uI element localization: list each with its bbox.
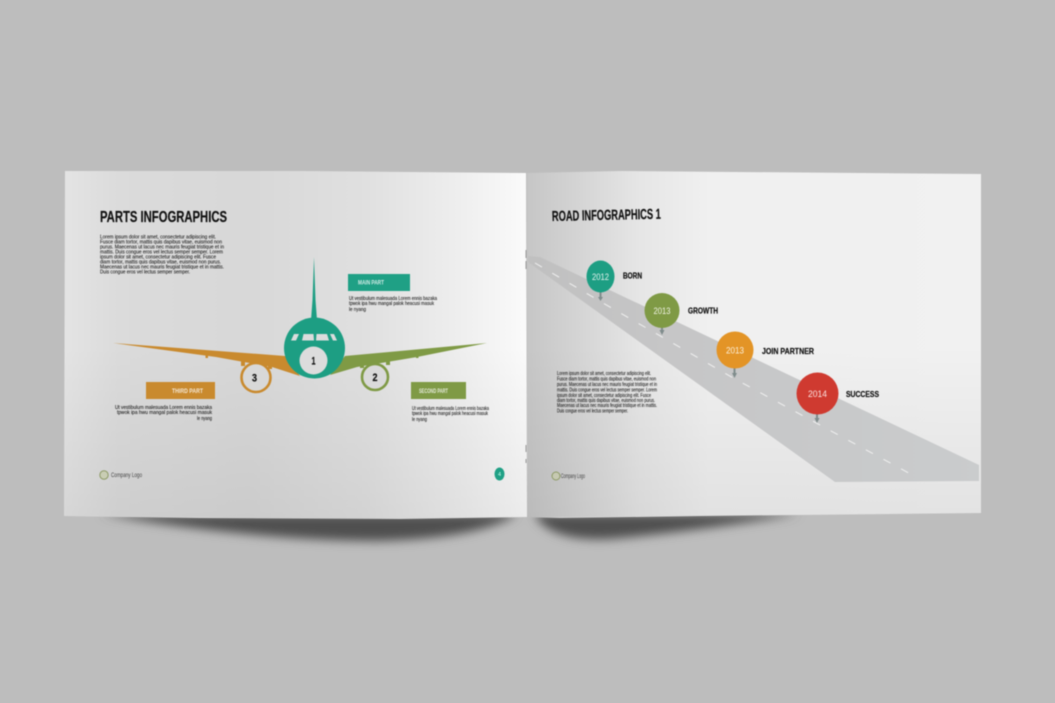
part 2 engine	[362, 364, 388, 390]
title: parts infographics: PARTS INFOGRAPHICS	[100, 209, 227, 226]
text block: road intro	[557, 371, 657, 414]
text block: third part	[115, 405, 213, 422]
text block: parts intro: Fusce diam tortor, mattis quis dapibus vitae, euismod non	[100, 240, 222, 246]
text block: main part: tpwok ipa hwu mangal palok heacusi masuk	[349, 301, 434, 307]
airplane diagram	[113, 257, 487, 392]
label: second part	[411, 382, 466, 399]
part 1 circle	[300, 346, 328, 374]
label: second part: SECOND PART	[419, 388, 448, 395]
title: road infographics: ROAD INFOGRAPHICS 1	[552, 207, 661, 225]
right wing	[330, 343, 487, 375]
part 3 engine: 3	[252, 372, 257, 384]
text block: road intro: mattis. Duis congue eros vel lectus semper semper. Lorem	[557, 388, 657, 394]
label: main part: MAIN PART	[358, 280, 384, 286]
left page	[64, 171, 527, 519]
page shadows	[100, 514, 800, 541]
text block: parts intro: mattis. Duis congue eros vel lectus semper semper. Lorem	[100, 250, 223, 256]
page number	[494, 468, 504, 480]
text block: third part: Ut vestibulum malesuada Lorem ennis bazaka	[115, 405, 213, 411]
road centre dashes	[535, 263, 918, 478]
label: third part	[146, 382, 215, 399]
right company logo	[552, 472, 585, 480]
milestone 2013 join partner	[716, 332, 814, 378]
milestone 2013 growth	[644, 293, 718, 335]
milestone 2013 growth: GROWTH	[688, 306, 718, 316]
part 3 engine	[242, 363, 270, 392]
fuselage	[284, 318, 345, 378]
part 2 engine: 2	[372, 372, 378, 384]
tail fin	[311, 257, 317, 320]
text block: parts intro: ipsum dolor sit amet, consectetur adipiscing elit. Fusce	[100, 254, 216, 260]
spine stitches	[526, 250, 527, 463]
text block: road intro: Lorem ipsum dolor sit amet, consectetur adipiscing elit.	[557, 371, 651, 377]
milestone 2012 born: BORN	[623, 270, 642, 280]
text block: road intro: diam tortor, mattis quis dapibus vitae, euismod non purus.	[557, 398, 655, 404]
text block: second part: tpwok ipa hwu mangal palok heacusi masuk	[412, 411, 488, 417]
left company logo	[100, 471, 142, 479]
text block: second part	[412, 406, 490, 423]
right company logo: Company Logo	[561, 474, 585, 480]
page bottom shading	[64, 171, 981, 519]
text block: parts intro: Maecenas ut lacus nec mauris feugiat tristique et in mattis.	[100, 264, 224, 270]
text block: parts intro	[100, 234, 224, 276]
text block: second part: le nyang	[412, 417, 427, 423]
text block: road intro: Fusce diam tortor, mattis quis dapibus vitae, euismod non	[557, 376, 656, 382]
text block: road intro: Duis congue eros vel lectus semper semper.	[557, 408, 628, 414]
page number: 4	[498, 472, 501, 478]
left wing	[113, 343, 300, 376]
milestone 2013 growth: 2013	[654, 306, 670, 317]
text block: third part: le nyang	[197, 416, 212, 422]
text block: main part: le nyang	[349, 307, 366, 313]
text block: road intro: Maecenas ut lacus nec mauris feugiat tristique et in mattis.	[557, 403, 657, 409]
text block: main part	[349, 296, 438, 313]
text block: parts intro: Duis congue eros vel lectus semper semper.	[100, 270, 190, 276]
text block: road intro: ipsum dolor sit amet, consectetur adipiscing elit. Fusce	[557, 393, 651, 399]
milestone 2014 success	[796, 372, 879, 423]
milestone 2012 born: 2012	[592, 272, 609, 283]
text block: second part: Ut vestibulum malesuada Lorem ennis bazaka	[412, 406, 490, 412]
text block: parts intro: purus. Maecenas ut lacus nec mauris feugiat tristique et in	[100, 244, 224, 250]
text block: road intro: purus. Maecenas ut lacus nec mauris feugiat tristique et in	[557, 382, 657, 388]
label: third part: THIRD PART	[172, 388, 203, 395]
milestone 2013 join partner: 2013	[726, 346, 744, 356]
road	[528, 256, 979, 482]
cockpit windows	[291, 334, 337, 340]
milestone 2012 born	[586, 260, 642, 301]
text block: parts intro: diam tortor, mattis quis dapibus vitae, euismod non purus.	[100, 260, 221, 266]
left company logo: Company Logo	[111, 472, 142, 479]
text block: third part: tpwok ipa hwu mangal palok heacusi masuk	[117, 410, 212, 416]
right page	[527, 171, 981, 518]
part 1 circle: 1	[312, 356, 316, 368]
text block: main part: Ut vestibulum malesuada Lorem ennis bazaka	[349, 296, 438, 302]
milestone 2014 success: SUCCESS	[846, 389, 879, 399]
label: main part	[348, 274, 410, 291]
milestone 2013 join partner: JOIN PARTNER	[762, 346, 814, 356]
text block: parts intro: Lorem ipsum dolor sit amet, consectetur adipiscing elit.	[100, 234, 216, 240]
milestone 2014 success: 2014	[808, 389, 827, 400]
